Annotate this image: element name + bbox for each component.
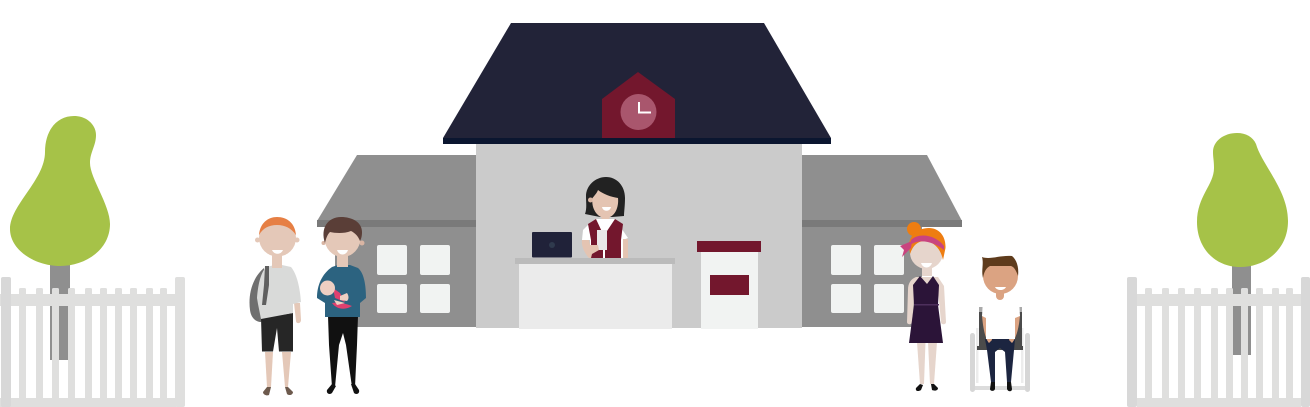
right tree	[1197, 133, 1288, 355]
central building block	[476, 143, 802, 328]
person: man in wheelchair	[970, 256, 1030, 392]
right fence	[1127, 277, 1310, 407]
receptionist	[582, 177, 628, 258]
left tree	[10, 116, 110, 360]
reception desk	[515, 258, 675, 329]
left fence	[0, 277, 185, 407]
laptop	[532, 232, 572, 258]
main roof	[443, 23, 831, 144]
person: woman with headband	[900, 222, 946, 391]
clock gable	[602, 72, 675, 138]
post box	[697, 241, 761, 329]
person: man holding baby	[317, 217, 366, 394]
right wing of building	[802, 155, 962, 327]
person: man with backpack	[250, 217, 301, 395]
left wing of building	[317, 155, 476, 327]
